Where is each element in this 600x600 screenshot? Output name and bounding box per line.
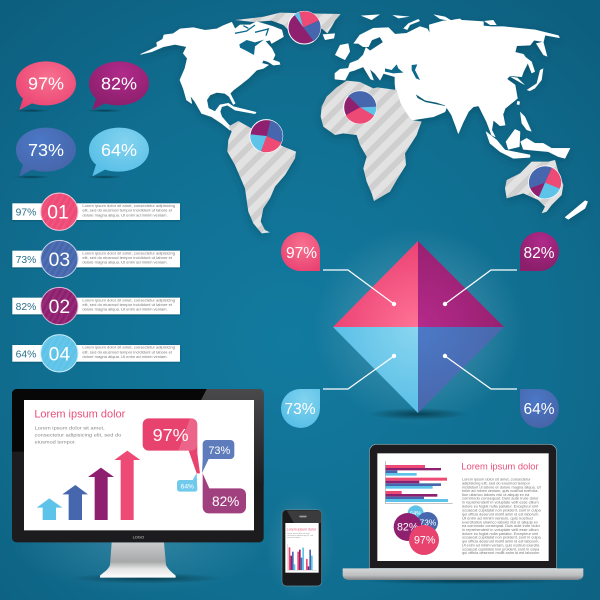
continent: Greenland [235,13,341,43]
callout: 82% [203,473,246,513]
row 03: Lorem ipsum dolor sit amet, consectetur adipisicing [82,251,175,255]
laptop paragraph: qui officia deserunt mollit anim id est laborum. [462,512,539,516]
Hudson Bay and channels [239,40,264,55]
continent: North America [141,22,283,130]
row 01 [12,193,180,230]
laptop paragraph: occaecat cupidatat non proident, sunt in culpa [462,536,541,540]
phone text: consectetur adipisicing elit, sed [287,534,313,537]
continent: Africa [321,81,422,201]
callout: 97% [143,418,200,473]
continent: East Asia [453,19,559,137]
phone text: Lorem ipsum dolor sit amet, [287,532,311,535]
arrow: purple [88,468,114,520]
phone bar chart [287,544,317,570]
drop: 82%: 82% [523,245,555,262]
laptop paragraph: dolore eu fugiat nulla pariatur. Excepteur sint [462,532,538,536]
drop: 73% [281,389,320,428]
row 02: Lorem ipsum dolor sit amet, consectetur adipisicing [82,298,175,302]
row 02: elit, sed do eiusmod tempor incididunt ut labore et [82,303,172,307]
phone screen [285,523,319,573]
laptop paragraph: incididunt ut labore et dolore magna aliqua. Ut [462,485,541,489]
inland seas [385,64,420,80]
row 03: dolore magna aliqua. Ut enim ad minim veniam. [82,261,168,265]
row 02: dolore magna aliqua. Ut enim ad minim veniam. [82,308,168,312]
laptop paragraph: occaecat cupidatat non proident, sunt in culpa [462,509,541,513]
monitor body [12,389,264,542]
continent: Australia [505,160,563,213]
laptop paragraph: Ut enim ad minim veniam, quis nostrud [462,516,533,520]
row 01: 01 [47,203,69,224]
drop: 82% [520,232,559,271]
diamond segment: blue [418,327,504,413]
laptop paragraph: in reprehenderit in voluptate velit esse cillum [462,528,539,532]
circle: 64%: 64% [410,511,421,517]
laptop paragraph: ea commodo consequat. Duis aute irure dolor [462,524,541,528]
diamond segment: purple [418,241,504,327]
callout: 73%: 73% [208,445,231,457]
row 03 [12,240,180,278]
circle: 97%: 97% [414,535,436,547]
desktop monitor [12,389,264,584]
diamond segment: cyan [333,327,418,413]
laptop screen [377,453,549,561]
callout: 64%: 64% [181,483,194,490]
callout: 64% [177,473,197,492]
bubble: 64%: 64% [101,140,137,160]
world map [141,13,588,233]
island: Iceland [323,33,335,40]
drop: 97% [281,232,320,271]
screen title: Lorem ipsum dolor [34,408,126,420]
row 01: 97% [16,208,36,219]
laptop base [343,568,583,580]
monitor screen [24,400,254,530]
row 01: dolore magna aliqua. Ut enim ad minim veniam. [82,213,168,217]
phone body [282,510,322,586]
smartphone [282,510,322,586]
monitor stand [100,542,176,578]
screen paragraph [35,426,122,445]
laptop paragraph: occaecat cupidatat non proident, sunt in culpa [462,547,540,551]
screen paragraph: Lorem ipsum dolor sit amet, [35,426,105,432]
pie: South America [250,120,283,152]
screen paragraph: eiusmod tempor. [35,439,76,445]
islands: Japan, Sakhalin, Kamchatka, Taiwan, Philippines [484,20,547,132]
phone title: Lorem ipsum dolor [287,527,317,531]
laptop paragraph: dolore eu fugiat nulla pariatur. Excepteur sint [462,505,538,509]
bubble: 73%: 73% [28,140,64,160]
laptop paragraph: adipisicing elit, sed do eiusmod tempor [462,481,531,485]
laptop [343,444,583,584]
laptop paragraph: qui officia deserunt mollit anim id est laborum. [462,540,539,544]
arrow: blue [62,485,88,520]
laptop paragraph: Ut enim ad minim veniam, quis nostrud exercita [462,544,540,548]
circle: 73%: 73% [420,518,437,528]
row 03: 73% [16,255,36,266]
row 04 [12,335,180,372]
pie: Australia [529,166,561,199]
phone text: eiusmod tempor. [287,536,301,539]
bubble: 82%: 82% [101,74,137,94]
connector lines [323,270,517,389]
row 04: 64% [16,349,36,360]
drop: 73%: 73% [284,401,316,418]
arrow: cyan [37,498,62,520]
row 04: Lorem ipsum dolor sit amet, consectetur adipisicing [82,346,175,350]
laptop paragraph: commodo consequat. Duis aute irure dolor [462,497,540,501]
row 03: elit, sed do eiusmod tempor incididunt ut labore et [82,256,172,260]
islands: Britain and Arctic [335,14,453,60]
laptop lid [369,444,557,568]
screen paragraph: consectetur adipisicing elit, sed do [35,433,122,439]
laptop paragraph: in reprehenderit in voluptate velit esse cillum [462,501,539,505]
laptop paragraph: enim ad minim veniam, quis nostrud exercita- [462,489,539,493]
callout: 97%: 97% [153,425,189,445]
circle: 82%: 82% [397,522,419,534]
pie: Greenland [288,11,321,44]
monitor logo: LOGO [133,535,144,540]
laptop title: Lorem ipsum dolor [461,462,539,472]
callout: 82%: 82% [212,494,239,509]
horizontal bar chart [385,461,453,504]
laptop paragraph: tion ullamco laboris nisi ut aliquip ex ea [462,493,530,497]
row 02: 82% [16,302,36,313]
laptop paragraph [462,477,541,555]
row 02: 02 [49,297,70,318]
drop: 97%: 97% [286,245,317,262]
bubble cluster [394,505,439,555]
row 03: 03 [49,250,70,271]
connector dots [392,302,447,358]
row 04: 04 [49,344,70,365]
drop: 64% [520,389,559,428]
callout: 73% [202,440,234,473]
row 01: Lorem ipsum dolor sit amet, consectetur adipisicing [82,204,175,208]
row 02 [12,287,180,325]
diamond segment: pink [333,241,418,327]
diamond diagram [281,227,559,428]
drop: 64%: 64% [523,401,555,418]
row 01: elit, sed do eiusmod tempor incididunt ut labore et [82,209,172,213]
laptop paragraph: Lorem ipsum dolor sit amet, consectetur [462,477,532,481]
pie charts on map [250,11,561,199]
laptop paragraph: qui officia deserunt mollit anim id est laborum [462,551,540,555]
continent: South America [227,121,296,233]
bubble: 97%: 97% [28,74,64,94]
continent: Europe and West Asia [335,14,483,133]
row 04: dolore magna aliqua. Ut enim ad minim veniam. [82,355,168,359]
speech bubbles [13,61,149,179]
islands: Indonesia and New Zealand [486,129,588,219]
arrow: pink [114,451,140,520]
pie: Africa [344,91,376,124]
numbered list [12,193,180,372]
row 04: elit, sed do eiusmod tempor incididunt ut labore et [82,350,172,354]
phone text [287,532,313,539]
laptop paragraph: exercitation ullamco laboris nisi ut aliquip ex [462,520,538,524]
